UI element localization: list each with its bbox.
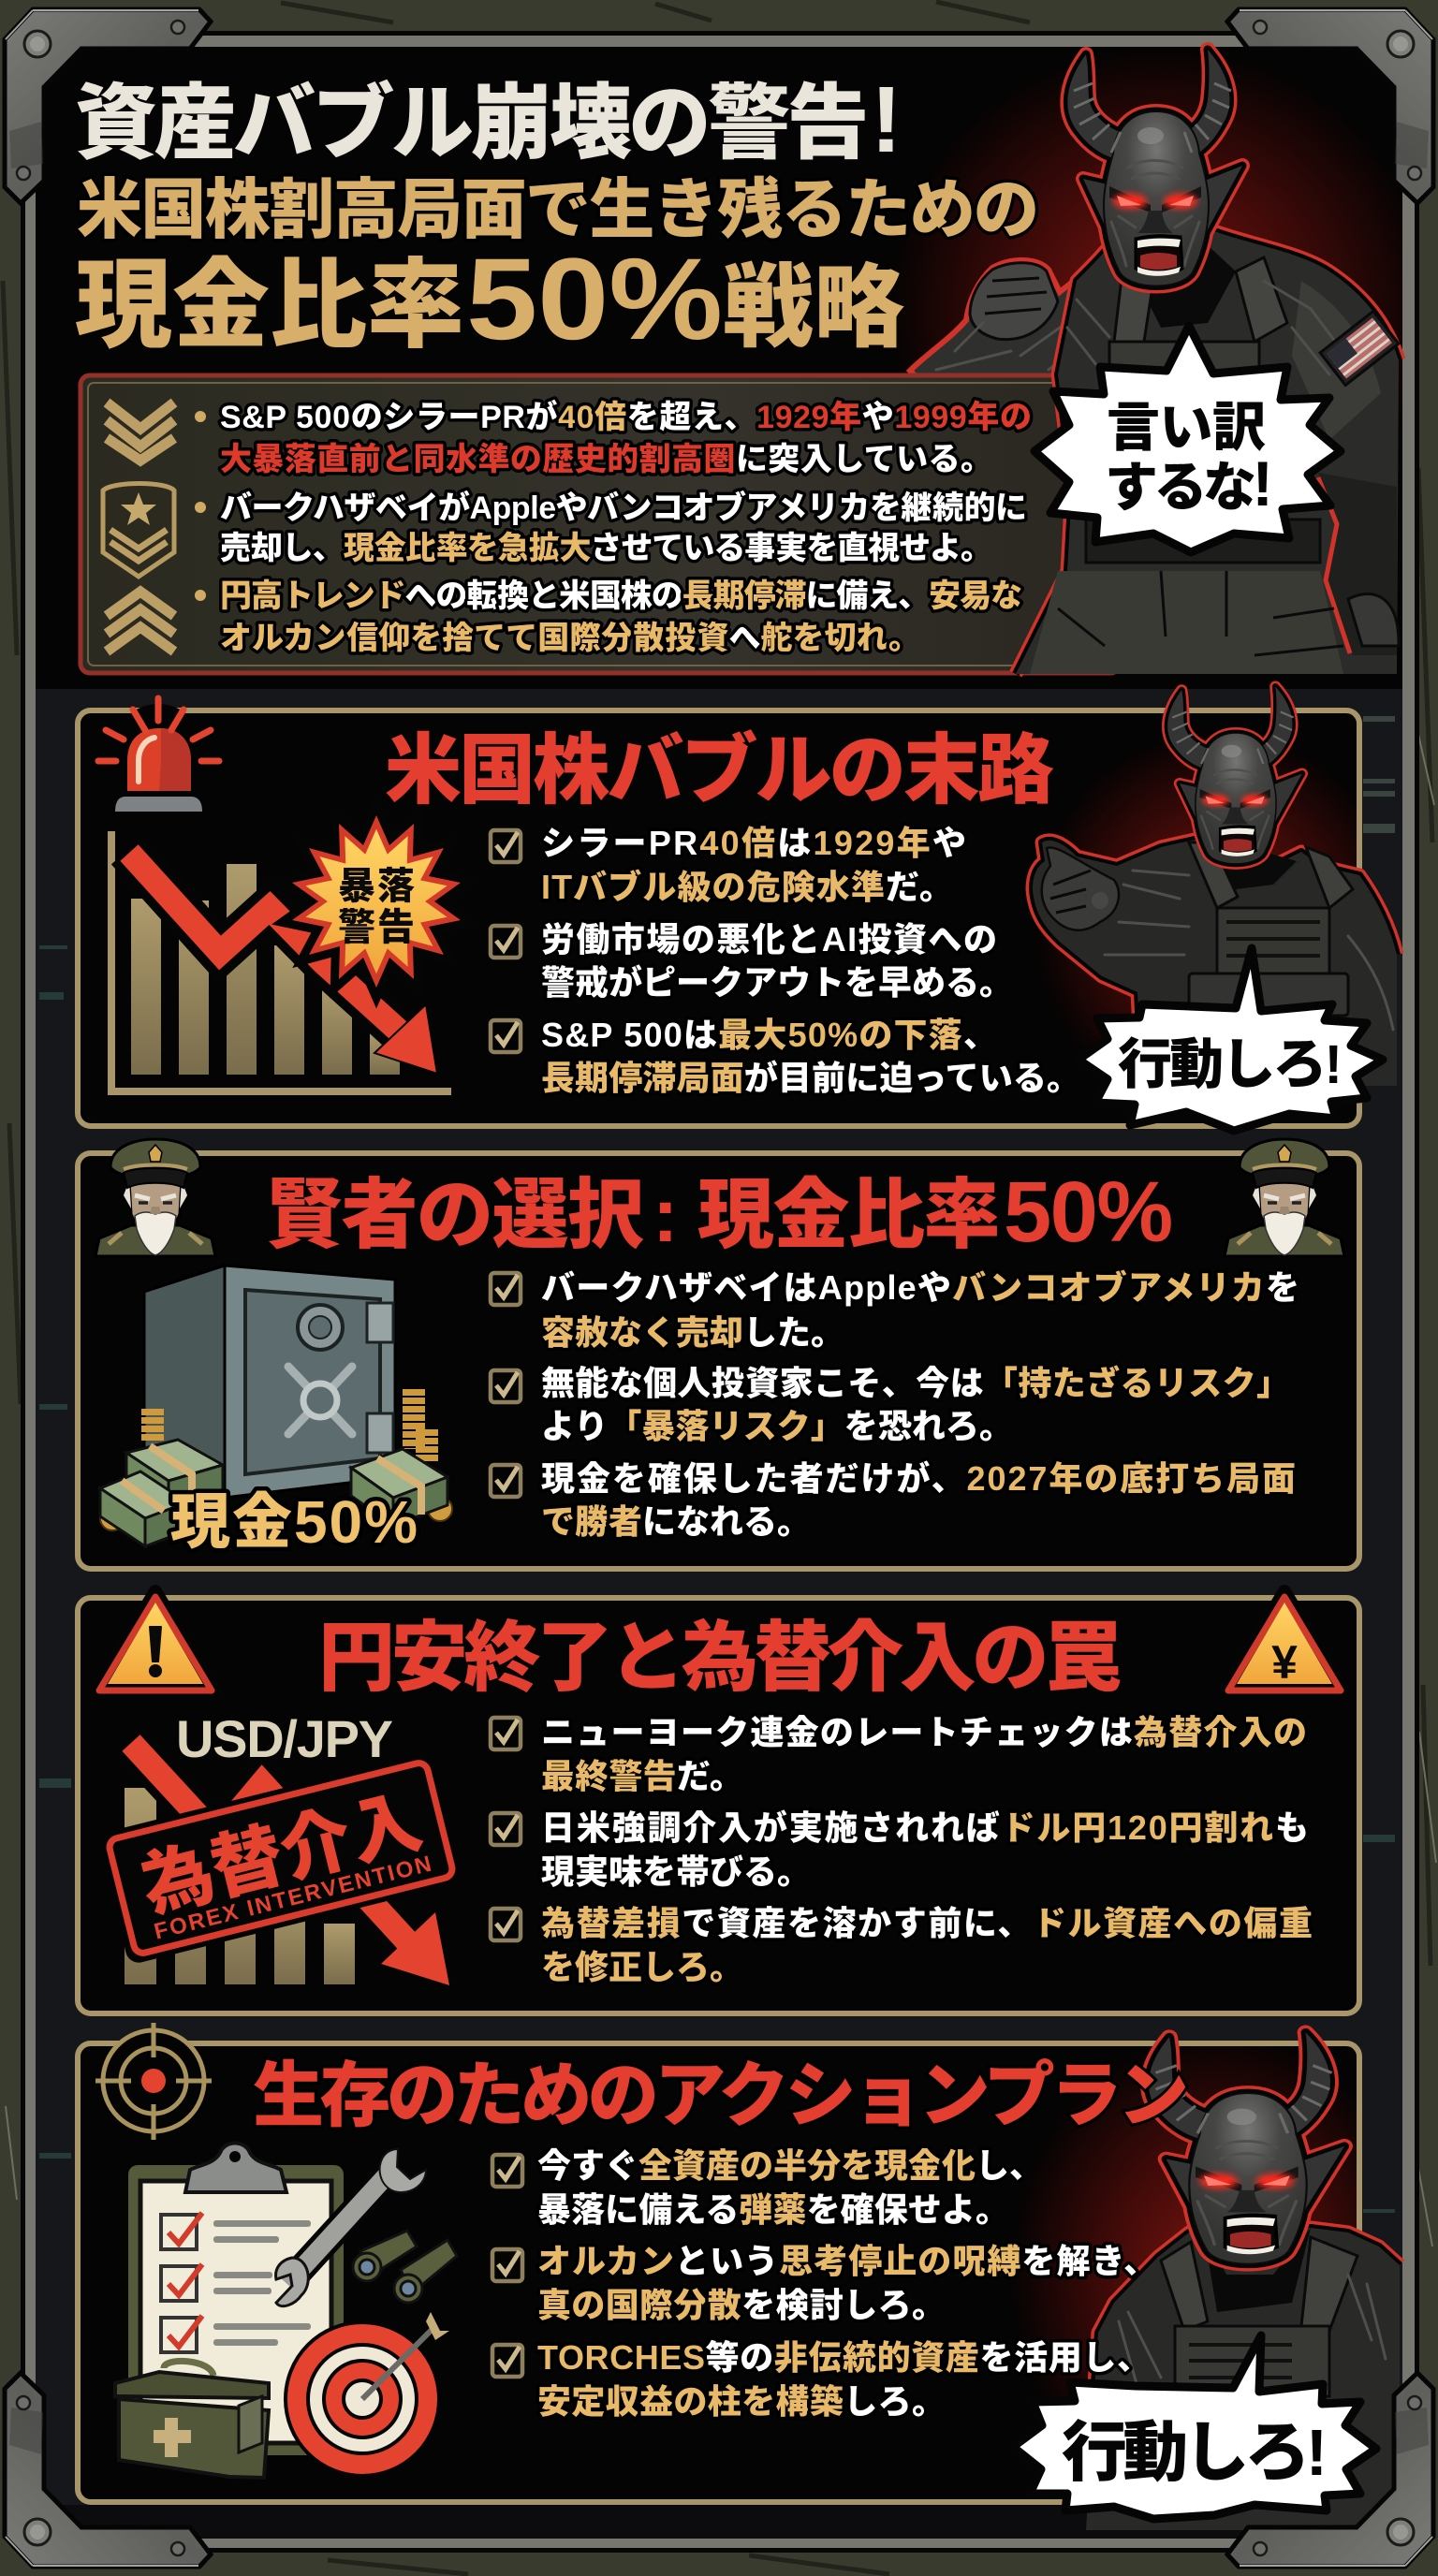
checklist [492,2146,1157,2421]
heading: 50% [1004,1164,1172,1260]
icon: upward chevrons [107,592,174,651]
icon: general right [1225,1139,1344,1256]
bar chart with crash arrow [111,831,451,1091]
icon: alarm siren [98,698,219,812]
speech bubble: 行動しろ [1013,2335,1376,2519]
checklist: 真の国際分散を検討しろ。 [537,2286,946,2324]
heading: 賢者の選択 [266,1173,643,1258]
title: 戦略 [723,256,904,359]
heading: 現金比率 [697,1173,999,1258]
panel: 生存のためのアクションプラン [78,2023,1423,2530]
icon: wrench [276,2149,426,2306]
demon 3 [1086,2032,1400,2530]
checklist: 今すぐ全資産の半分を現金化し、 [537,2146,1043,2185]
checklist: 労働市場の悪化とAI投資への [541,920,997,959]
heading: 生存のためのアクションプラン [253,2056,1189,2136]
icon: binoculars [353,2231,457,2303]
burst: 暴落警告: 暴落 [338,866,415,907]
header summary text: オルカン信仰を捨てて国際分散投資へ舵を切れ。 [220,621,920,656]
US flag shoulder patch [1320,311,1399,386]
header summary text: バークハザベイがAppleやバンコオブアメリカを継続的に [220,490,1027,526]
checklist [491,824,1080,1097]
icon: clipboard checklist [128,2144,344,2455]
header summary text: S&P 500のシラーPRが40倍を超え、1929年や1999年の [220,399,1032,435]
speech bubble: 行動しろ: 行動しろ! [1062,2416,1328,2489]
icon: sergeant chevrons [107,402,174,461]
checklist: ニューヨーク連金のレートチェックは為替介入の [541,1713,1307,1751]
checklist: 日米強調介入が実施されればドル円120円割れも [541,1808,1309,1847]
icon: warning triangle exclamation [95,1591,215,1692]
heading: 円安終了と為替介入の罠 [318,1616,1122,1701]
checklist: 現金を確保した者だけが、2027年の底打ち局面 [541,1459,1296,1498]
panel: 賢者の選択 [78,1139,1359,1569]
checklist: 容赦なく売却した。 [541,1313,844,1352]
checklist: より「暴落リスク」を恐れろ。 [541,1407,1013,1445]
demon 2 red glow [1047,749,1357,1045]
demon 1 torso and head [1016,50,1399,674]
icon: warning triangle yen [1225,1591,1344,1692]
panel: 米国株バブルの末路 [78,687,1400,1131]
demon 2 pointing [1033,687,1397,1086]
stamp: 為替介入: FOREX INTERVENTION [152,1852,433,1945]
icon: crosshair [95,2023,212,2140]
checklist: 最終警告だ。 [541,1757,743,1795]
label: USD/JPY: USD/JPY [176,1709,393,1768]
speech bubble: 言い訳するな [1034,326,1341,552]
icon: warning triangle yen: ¥ [1271,1636,1298,1689]
title: 50% [466,235,723,364]
checklist: 暴落に備える弾薬を確保せよ。 [537,2190,1009,2229]
icon: general left [95,1139,215,1256]
header summary box [81,375,1120,673]
demon 3 red glow [1022,2046,1357,2397]
icon: ammo box [115,2361,269,2478]
checklist: 長期停滞局面が目前に迫っている。 [541,1059,1080,1097]
icon: star rank badge [103,483,174,577]
checklist: 無能な個人投資家こそ、今は「持たざるリスク」 [541,1364,1290,1402]
heading: : [653,1173,677,1258]
demon 1 raised fist and forearm [910,251,1137,397]
checklist: シラーPR40倍は1929年や [541,824,966,862]
checklist: バークハザベイはAppleやバンコオブアメリカを [541,1268,1299,1307]
icon: target with arrow [286,2312,449,2476]
header summary text: 売却し、現金比率を急拡大させている事実を直視せよ。 [220,531,992,566]
header summary text: 円高トレンドへの転換と米国株の長期停滞に備え、安易な [220,578,1022,614]
header summary text: 大暴落直前と同水準の歴史的割高圏に突入している。 [220,442,992,477]
title: 資産バブル崩壊の警告 [75,77,866,169]
checklist [491,1268,1299,1541]
panel: 円安終了と為替介入の罠 [78,1591,1359,2013]
checklist: 為替差損で資産を溶かす前に、ドル資産への偏重 [541,1904,1313,1942]
bar chart with arrow [125,1743,449,1985]
speech bubble: 言い訳するな: 言い訳 [1107,398,1266,458]
checklist: TORCHES等の非伝統的資産を活用し、 [537,2338,1151,2377]
speech bubble: 行動しろ: 行動しろ! [1118,1034,1343,1095]
checklist: ITバブル級の危険水準だ。 [541,868,953,906]
title [75,67,1039,364]
title: 現金比率 [75,252,464,360]
icon: safe with cash [100,1266,452,1556]
title: ! [871,67,899,172]
title: 米国株割高局面で生き残るための [77,173,1039,246]
header: red glow behind demon [904,62,1402,399]
checklist: オルカンという思考停止の呪縛を解き、 [537,2242,1157,2280]
stamp: 為替介入 [96,1750,465,1966]
checklist: を修正しろ。 [541,1948,743,1986]
label: 現金50%: 現金50% [170,1488,418,1556]
speech bubble: 言い訳するな: するな! [1105,448,1273,520]
checklist: S&P 500は最大50%の下落、 [541,1016,997,1054]
checklist: 警戒がピークアウトを早める。 [541,963,1013,1002]
burst: 暴落警告: 警告 [338,907,415,948]
checklist: 現実味を帯びる。 [541,1852,811,1891]
stamp: 為替介入: 為替介入 [134,1781,430,1927]
speech bubble: 行動しろ [1078,948,1383,1131]
checklist: 安定収益の柱を構築しろ。 [537,2382,946,2421]
header summary text [195,399,1032,656]
burst: 暴落警告 [292,815,461,988]
heading: 米国株バブルの末路 [385,728,1054,813]
checklist [491,1713,1313,1986]
checklist: で勝者になれる。 [541,1502,811,1541]
